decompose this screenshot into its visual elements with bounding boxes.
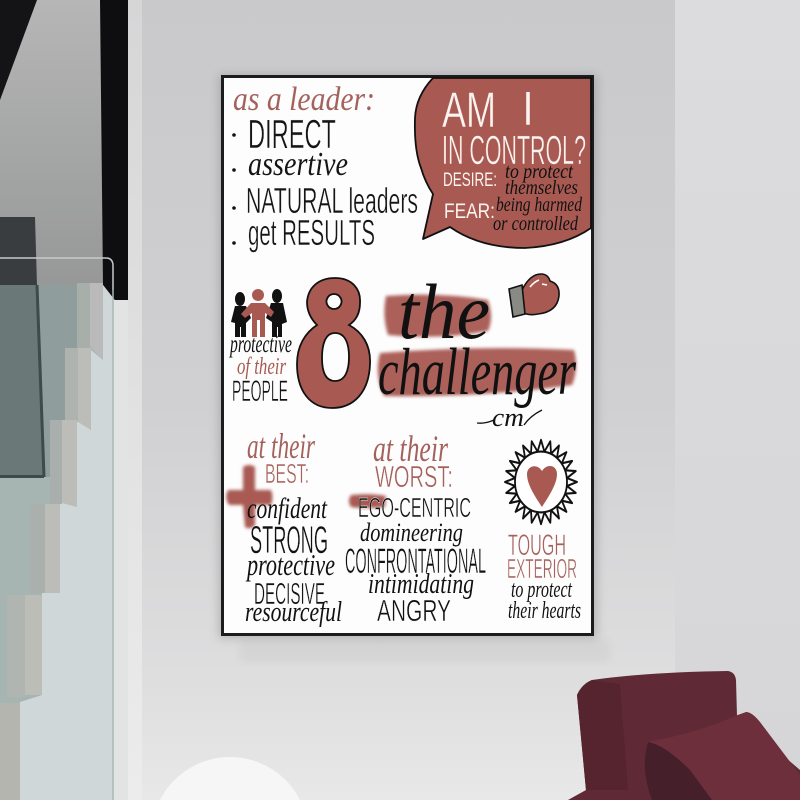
- column: at their worst: [345, 429, 486, 628]
- framed poster: [219, 75, 610, 662]
- ego-centric: EGO-CENTRIC: [358, 492, 471, 523]
- heading: at their: at their: [373, 429, 448, 470]
- column: at their best: STRONG: [250, 519, 328, 562]
- desire text line two: themselves: [505, 177, 578, 199]
- floor lamp globe: [160, 757, 300, 800]
- text: tough exterior: EXTERIOR: [507, 553, 577, 584]
- text: protective of their people: [229, 331, 292, 408]
- signature: [477, 403, 542, 432]
- icon: heart in spiked sun: [505, 440, 577, 524]
- heading: best: BEST:: [265, 458, 309, 489]
- bubble title: am: AM: [442, 82, 496, 138]
- column: at their best: [226, 426, 342, 628]
- speech bubble: am I in control: [415, 78, 591, 248]
- challenger: challenger: [378, 334, 576, 409]
- text: CONFRONTATIONAL: [345, 542, 486, 581]
- heading: as a leader: as a leader:: [233, 81, 375, 118]
- confident: confident: [247, 492, 327, 525]
- icon: three people: [231, 289, 287, 337]
- desire label: DESIRE:: [443, 170, 497, 191]
- icon: minus sign: [349, 494, 386, 508]
- list item: assertive: assertive: [248, 146, 348, 183]
- resourceful: resourceful: [245, 596, 342, 628]
- fear label: FEAR:: [444, 200, 495, 223]
- angry: ANGRY: [377, 593, 451, 628]
- desire text: to protect: [505, 159, 574, 183]
- icon: boxing glove: [509, 274, 559, 317]
- their hearts: their hearts: [508, 598, 581, 624]
- burgundy armchair: [568, 671, 800, 800]
- heading: worst: WORST:: [375, 459, 453, 494]
- list item: direct: DIRECT: [248, 111, 336, 157]
- text: PEOPLE: [232, 375, 288, 408]
- tough: TOUGH: [508, 529, 566, 562]
- column: at their best: DECISIVE: [254, 576, 325, 611]
- heading: at their: at their: [247, 426, 316, 466]
- of their: of their: [237, 354, 286, 380]
- title: the challenger: [378, 270, 576, 409]
- fear text line two: or controlled: [493, 213, 579, 235]
- bubble shape: [415, 78, 591, 248]
- brush stroke behind the: [384, 295, 491, 337]
- spiked ring: [505, 440, 577, 524]
- signature: cm: [492, 403, 524, 432]
- number 8: [297, 278, 370, 408]
- domineering: domineering: [360, 518, 463, 547]
- protective: protective: [229, 331, 292, 358]
- icon: plus sign: [226, 465, 272, 528]
- list item: get results: get RESULTS: [248, 212, 375, 253]
- to protect: to protect: [511, 577, 573, 603]
- bubble title: I: I: [522, 83, 534, 136]
- brush stroke behind challenger: [378, 348, 576, 396]
- bubble subtitle: IN CONTROL?: [442, 127, 586, 173]
- protective: protective: [246, 547, 335, 582]
- intimidating: intimidating: [368, 569, 474, 600]
- staircase with glass railing: [0, 217, 128, 800]
- text: tough exterior: [507, 529, 581, 624]
- panel: as a leader list: [232, 81, 418, 253]
- fear text: being harmed: [496, 194, 583, 216]
- list item: natural leaders: NATURAL leaders: [246, 180, 418, 221]
- the: the: [398, 270, 490, 356]
- heart: [527, 466, 557, 507]
